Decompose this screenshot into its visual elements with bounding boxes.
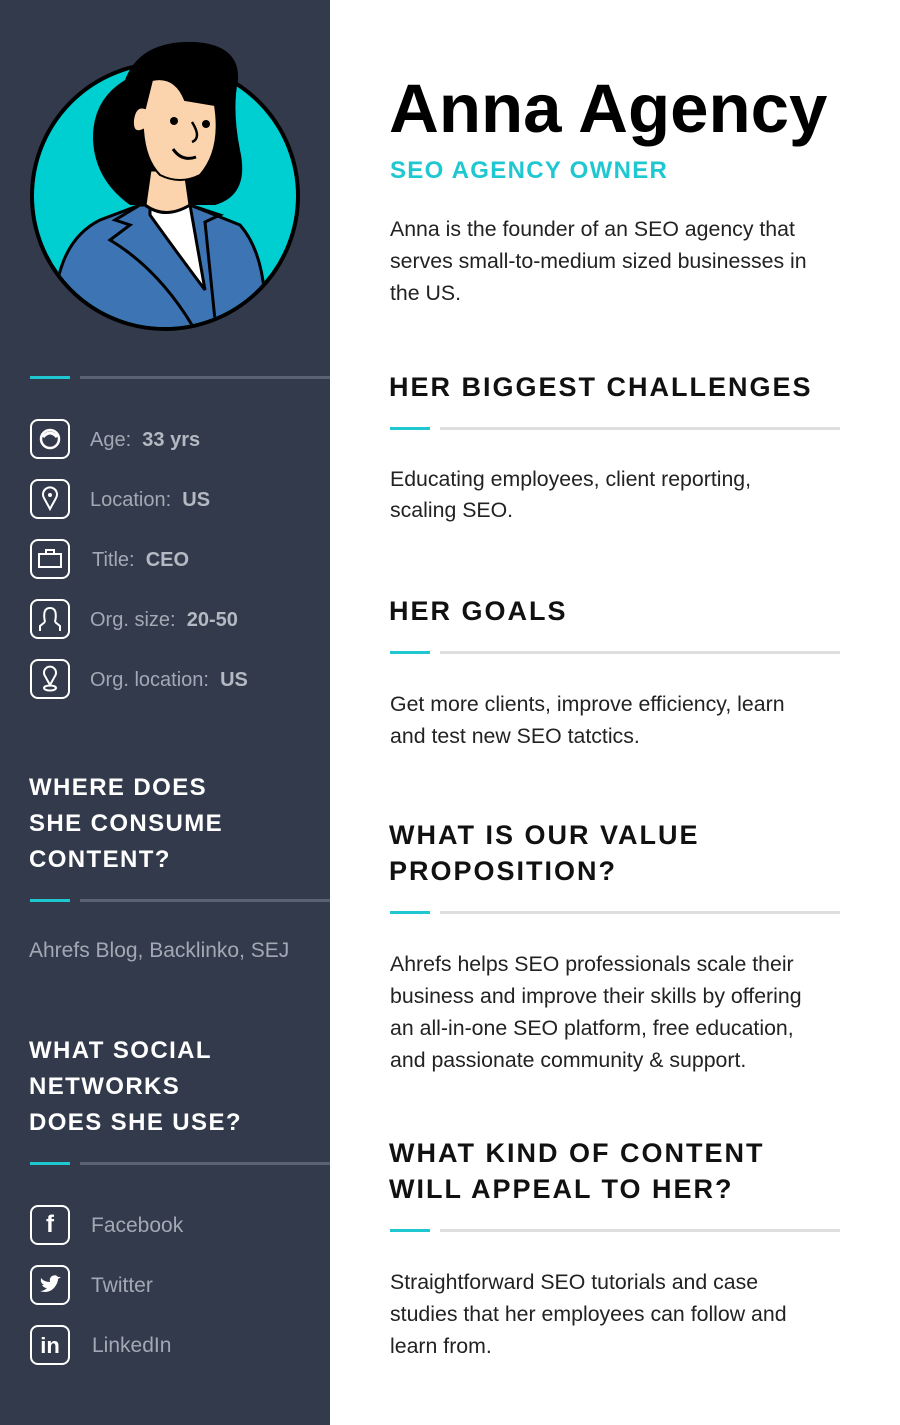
social: linkedin: in [40,1333,60,1358]
social: linkedin [30,1325,171,1365]
text: value proposition: and passionate community & support. [390,1048,746,1072]
text: value proposition: an all-in-one SEO platform, free education, [390,1016,794,1040]
info: location [30,479,210,519]
text: goals: and test new SEO tatctics. [390,724,640,748]
heading: social networks: NETWORKS [29,1073,180,1100]
title: Anna Agency [389,70,827,147]
text: goals: Get more clients, improve efficiency, learn [390,692,785,716]
text: value proposition: business and improve their skills by offering [390,984,802,1008]
avatar [30,42,300,331]
social: twitter [30,1265,153,1305]
text: goals [390,692,785,748]
text: challenges: scaling SEO. [390,498,513,522]
heading: where content: WHERE DOES [29,774,207,801]
text: content appeal: studies that her employees can follow and [390,1302,787,1326]
info: org size [30,599,238,639]
info: org location [30,659,248,699]
heading: challenges: HER BIGGEST CHALLENGES [389,372,813,402]
heading: content appeal [389,1138,764,1204]
social: facebook: Facebook [91,1214,183,1237]
text: value proposition [390,952,802,1072]
text: content appeal [390,1270,787,1358]
intro text: the US. [390,281,461,305]
social: twitter: Twitter [91,1274,153,1297]
intro text [390,217,807,305]
heading: where content [29,774,223,873]
info: age [30,419,200,459]
heading: social networks [29,1037,242,1136]
text: challenges [390,467,751,522]
info: title [30,539,189,579]
text: sources: Ahrefs Blog, Backlinko, SEJ [29,939,289,962]
text: challenges: Educating employees, client reporting, [390,467,751,491]
social: facebook [30,1205,184,1245]
heading: value proposition: WHAT IS OUR VALUE [389,820,700,850]
subtitle: SEO AGENCY OWNER [390,157,668,184]
heading: value proposition: PROPOSITION? [389,856,617,886]
info: org size: Org. size: 20-50 [90,609,238,631]
heading: where content: SHE CONSUME [29,810,223,837]
info: age: Age: 33 yrs [90,429,200,451]
text: content appeal: Straightforward SEO tutorials and case [390,1270,758,1294]
sidebar [0,0,330,1425]
heading: goals: HER GOALS [389,596,568,626]
heading: value proposition [389,820,700,886]
text: value proposition: Ahrefs helps SEO professionals scale their [390,952,794,976]
social: facebook: f [46,1211,54,1238]
heading: content appeal: WILL APPEAL TO HER? [389,1174,734,1204]
heading: where content: CONTENT? [29,846,171,873]
heading: social networks: WHAT SOCIAL [29,1037,212,1064]
info: org location: Org. location: US [90,669,248,691]
info: location: Location: US [90,489,210,511]
heading: content appeal: WHAT KIND OF CONTENT [389,1138,764,1168]
social: linkedin: LinkedIn [92,1334,171,1357]
intro text: serves small-to-medium sized businesses in [390,249,807,273]
text: content appeal: learn from. [390,1334,492,1358]
info: title: Title: CEO [92,549,189,571]
intro text: Anna is the founder of an SEO agency that [390,217,795,241]
heading: social networks: DOES SHE USE? [29,1109,242,1136]
